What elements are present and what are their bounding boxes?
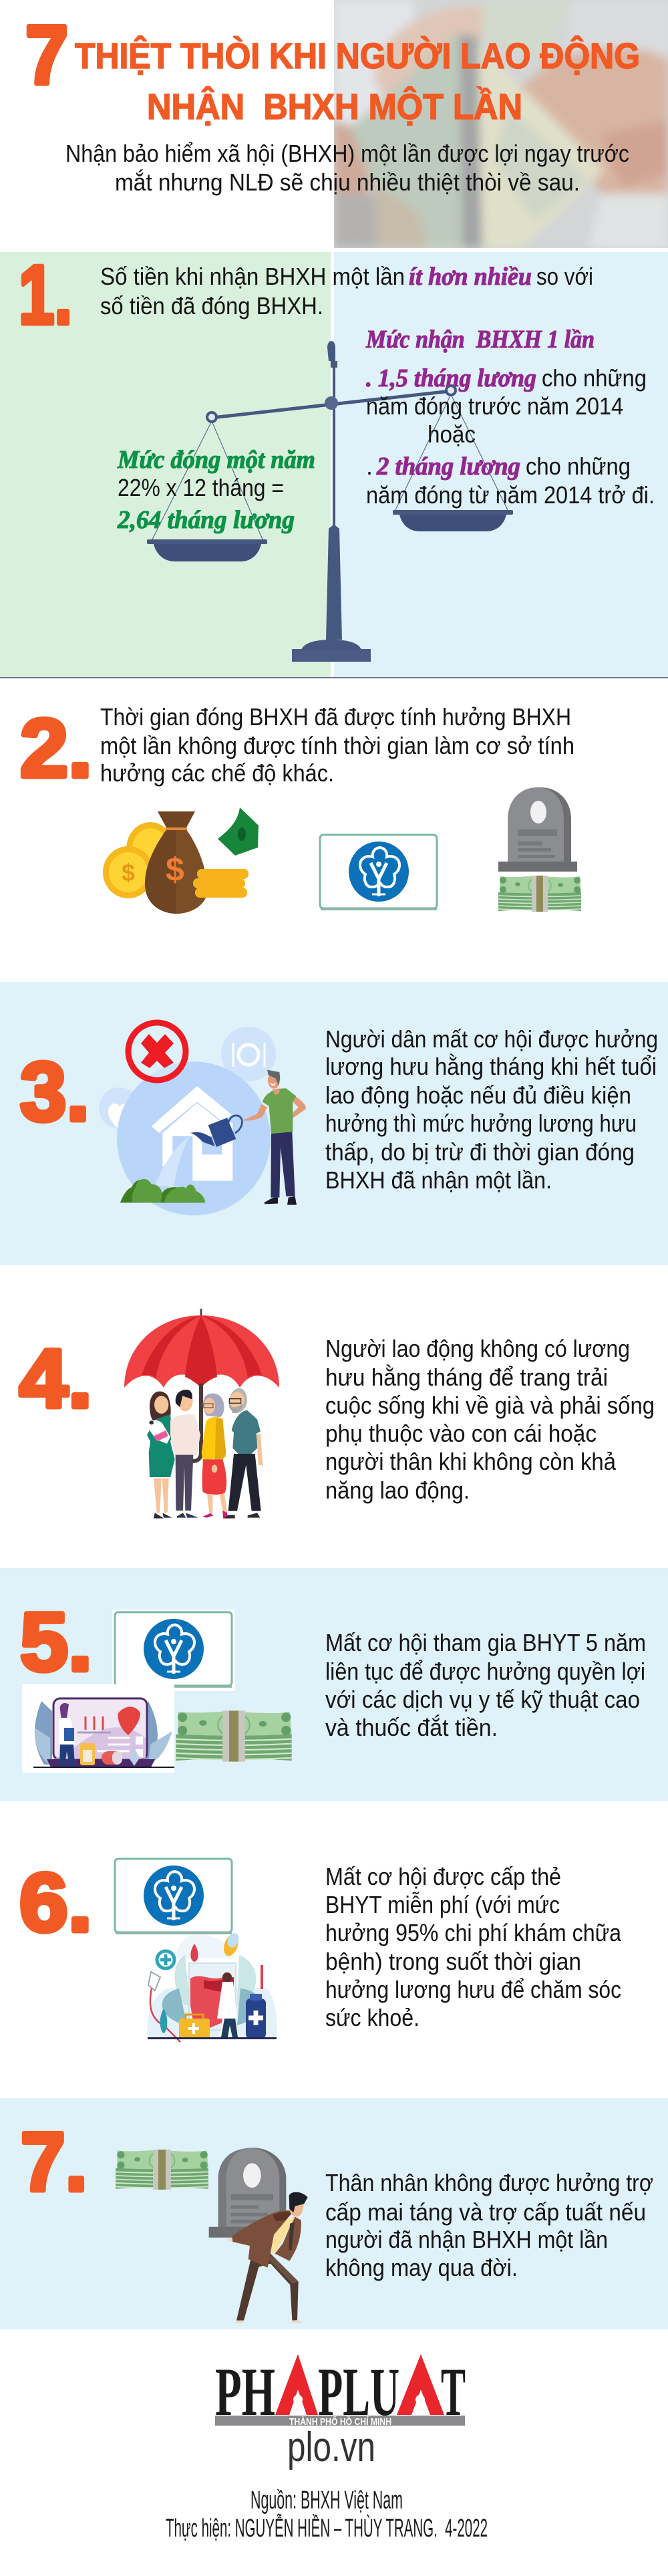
icon: money bag and coins: $ (166, 851, 184, 888)
logo: Pháp Luật (215, 2354, 466, 2430)
left pan label: 22% x 12 tháng = (118, 474, 284, 501)
section 3 text: lao động hoặc nếu đủ điều kiện (325, 1081, 631, 1109)
icon: social insurance logo card (317, 832, 440, 914)
illustration: blood donation medical (148, 1932, 277, 2042)
illustration: man carrying gravestone (209, 2148, 308, 2323)
section 6 text: sức khoẻ. (325, 2004, 420, 2031)
logo: Pháp Luật: PLU (318, 2354, 399, 2430)
section 6 text: hưởng lương hưu để chăm sóc (325, 1976, 621, 2003)
headline line 2: NHẬN BHXH MỘT LẦN (147, 86, 522, 127)
number 3: 3. (20, 1046, 90, 1138)
source credit: Nguồn: BHXH Việt Nam (251, 2486, 403, 2515)
right pan label: . 1,5 tháng lương (366, 364, 536, 392)
panel 1 bottom rule (0, 677, 668, 678)
section 5 text (325, 1629, 646, 1741)
section 4 text: người thân khi không còn khả (325, 1448, 617, 1475)
number 2: 2. (20, 702, 92, 795)
left pan label: Mức đóng một năm (117, 446, 315, 474)
section 6 text (325, 1863, 622, 2031)
illustration: medical screen (22, 1684, 174, 1773)
website: plo.vn (287, 2424, 375, 2470)
intro text (65, 140, 629, 196)
right pan label: Mức nhận BHXH 1 lần (365, 326, 595, 354)
panel 1: comparison (0, 249, 668, 678)
section 7 text: người đã nhận BHXH một lần (325, 2226, 608, 2253)
section 4 text (325, 1335, 655, 1504)
right pan label: hoặc (428, 420, 476, 448)
icon: social insurance logo card (112, 1609, 235, 1691)
section 6 text: Mất cơ hội được cấp thẻ (325, 1863, 561, 1890)
right pan label (365, 326, 655, 509)
number 1: 1. (19, 249, 72, 342)
section 4 text: phụ thuộc vào con cái hoặc (325, 1420, 597, 1447)
section 6 text: hưởng 95% chi phí khám chữa (325, 1919, 622, 1946)
section 3 text: thấp, do bị trừ đi thời gian đóng (325, 1138, 635, 1166)
section 7 text: không may qua đời. (325, 2254, 518, 2281)
illustration: family under umbrella (124, 1309, 279, 1519)
section 3 text: BHXH đã nhận một lần. (325, 1166, 552, 1194)
number 7: 7. (21, 2116, 88, 2208)
intro text: mắt nhưng NLĐ sẽ chịu nhiều thiệt thòi về sau. (115, 168, 580, 196)
number 5: 5. (20, 1596, 92, 1688)
section 2 text: hưởng các chế độ khác. (100, 759, 334, 787)
panel 7 background (0, 2098, 668, 2329)
section 6 text: bệnh) trong suốt thời gian (325, 1948, 581, 1975)
panel 1 statement: Số tiền khi nhận BHXH một lần (100, 263, 405, 290)
section 3 text (325, 1025, 658, 1194)
section 6 (19, 1856, 622, 2042)
right pan label: cho những (526, 453, 631, 480)
panel 3 background (0, 982, 668, 1265)
section 4 text: Người lao động không có lương (325, 1335, 630, 1362)
panel 5 background (0, 1568, 668, 1801)
right pan label: năm đóng trước năm 2014 (366, 392, 623, 420)
logo: Pháp Luật: T (441, 2354, 466, 2430)
right pan label: 2 tháng lương (376, 453, 520, 481)
icon: social insurance logo card (112, 1856, 235, 1938)
section 7 text (325, 2169, 653, 2281)
left pan label: 2,64 tháng lương (117, 506, 295, 534)
balance scale (147, 341, 513, 662)
icon: gravestone (498, 787, 577, 872)
panel 3 (0, 982, 668, 1265)
background photo: hands holding banknotes (334, 0, 668, 248)
section 5 text: với các dịch vụ y tế kỹ thuật cao (325, 1686, 640, 1713)
title (25, 9, 640, 127)
section 2 text: Thời gian đóng BHXH đã được tính hưởng BHXH (100, 703, 571, 731)
footer (166, 2354, 488, 2543)
panel 5 (0, 1568, 668, 1801)
icon: money bag and coins: $ (122, 859, 135, 886)
section 4 text: hưu hằng tháng để trang trải (325, 1364, 608, 1391)
right pan label: . (366, 453, 373, 480)
left pan label (117, 446, 315, 534)
panel 1 statement: số tiền đã đóng BHXH. (100, 292, 323, 319)
panel 1 statement: ít hơn nhiều (409, 263, 532, 291)
section 6 text: BHYT miễn phí (với mức (325, 1891, 560, 1918)
icon: banknote stack (116, 2150, 208, 2190)
number 6: 6. (19, 1857, 92, 1949)
panel 1 blue background (334, 252, 668, 677)
panel 7 (0, 2098, 668, 2329)
icon: banknote stack (498, 876, 581, 912)
section 4 (19, 1309, 655, 1519)
section 2 (20, 702, 581, 914)
panel 1 statement: so với (536, 263, 593, 290)
section 5 text: và thuốc đắt tiền. (325, 1714, 498, 1741)
illustration: house and man watering (99, 1023, 306, 1215)
section 2 text (100, 703, 574, 787)
logo: Pháp Luật: THÀNH PHỐ HỒ CHÍ MINH (289, 2416, 391, 2428)
panel 1 green background (0, 252, 331, 677)
icon: money bag and coins (103, 807, 259, 914)
icon: banknote stack (176, 1710, 292, 1762)
panel 1 statement (100, 263, 593, 319)
section 7 text: cấp mai táng và trợ cấp tuất nếu (325, 2198, 646, 2226)
number 4: 4. (19, 1333, 92, 1425)
logo: Pháp Luật: PH (215, 2354, 275, 2430)
big numeral 7: 7 (25, 9, 68, 102)
section 2 text: một lần không được tính thời gian làm cơ sở tính (100, 732, 574, 759)
section 4 text: năng lao động. (325, 1476, 470, 1504)
right pan label: cho những (542, 364, 647, 392)
